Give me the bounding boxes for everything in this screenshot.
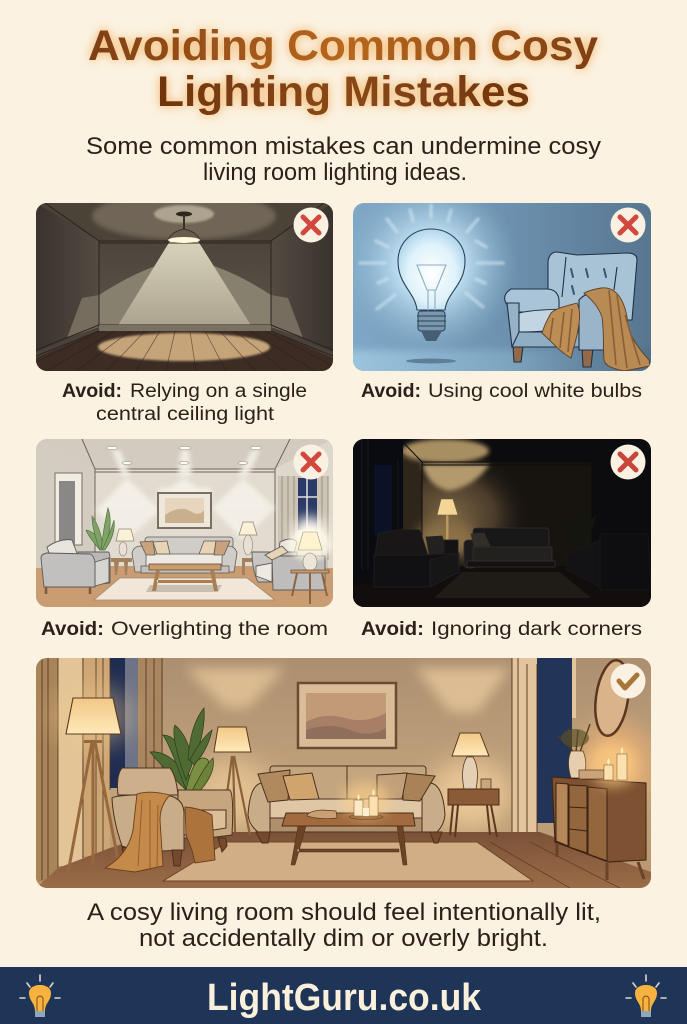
panel: single central ceiling light: [36, 203, 333, 371]
icon: cross badge: [610, 208, 646, 242]
subtitle: living room lighting ideas.: [203, 159, 467, 186]
floor lamp: [437, 499, 458, 542]
centre sofa: [464, 528, 555, 568]
caption: cool white bulbs: [361, 381, 642, 402]
coffee table with candles: [282, 782, 415, 865]
doorway: [512, 658, 576, 836]
right sofa: [567, 534, 651, 590]
caption: single central ceiling light: Relying on a single: [130, 381, 307, 402]
caption: single central ceiling light: Avoid:: [62, 381, 122, 402]
caption: cool white bulbs: Using cool white bulbs: [428, 381, 642, 402]
pendant lamp: [168, 212, 200, 243]
icon: light bulb: [398, 229, 465, 341]
light rays: [360, 205, 503, 309]
orange throw blanket: [105, 792, 215, 872]
bulb shadow: [406, 358, 456, 364]
door: [55, 473, 82, 545]
left armchair: [41, 540, 110, 594]
sideboard candles: [579, 743, 637, 787]
caption: single central ceiling light: [62, 381, 307, 425]
closing statement: [87, 899, 601, 952]
subtitle: Some common mistakes can undermine cosy: [86, 133, 601, 160]
sideboard: [552, 777, 646, 880]
icon: cross badge: [294, 444, 328, 480]
sofa: [132, 537, 237, 573]
subtitle: [86, 133, 601, 186]
panel: dark corners: [353, 439, 651, 607]
closing statement: not accidentally dim or overly bright.: [139, 925, 548, 952]
caption: overlighting: [41, 619, 328, 640]
caption: overlighting: Overlighting the room: [111, 619, 328, 640]
tufting: [571, 269, 606, 294]
armchair: [505, 252, 637, 367]
right armchair: [252, 539, 325, 590]
armchair: [112, 768, 233, 866]
icon: cross badge: [294, 208, 328, 242]
caption: single central ceiling light: central ceiling light: [96, 404, 275, 425]
plant: [150, 708, 213, 795]
footer wordmark: LightGuru.co.uk: [207, 977, 482, 1019]
title: [88, 22, 598, 116]
sofa: [248, 766, 445, 843]
panel: overlit room: [36, 439, 333, 607]
coffee table: [149, 564, 221, 591]
floor and rug: [36, 566, 333, 607]
plant silhouette: [592, 516, 596, 528]
left sofa: [374, 530, 459, 587]
caption: dark corners: Avoid:: [361, 619, 424, 640]
panel: cool white bulb: [353, 203, 651, 371]
wall glows: [185, 668, 651, 830]
icon: footer bulb left: [20, 975, 60, 1017]
throw blanket: [542, 288, 650, 371]
framed picture: [158, 493, 211, 528]
icon: footer bulb right: [626, 975, 666, 1017]
icon: check badge: [610, 664, 646, 698]
caption: dark corners: Ignoring dark corners: [431, 619, 642, 640]
window with curtains: [278, 476, 328, 568]
caption: overlighting: Avoid:: [41, 619, 104, 640]
ceiling with glow: [40, 203, 329, 240]
rug and floor: [353, 566, 651, 607]
caption: cool white bulbs: Avoid:: [361, 381, 421, 402]
tripod floor lamp small: [214, 727, 251, 835]
ceiling and side walls: [36, 439, 332, 568]
caption: dark corners: [361, 619, 642, 640]
panel: cosy room: [36, 658, 651, 888]
ceiling spotlights: [106, 446, 262, 464]
window and curtains: [353, 439, 403, 574]
closing statement: A cosy living room should feel intentionally lit,: [87, 899, 601, 926]
glowing table lamp: [288, 529, 332, 604]
framed painting: [298, 683, 396, 748]
light cones: [96, 450, 275, 540]
back lamps and side tables: [111, 522, 258, 576]
title: Avoiding Common Cosy: [88, 22, 598, 70]
walls: [36, 203, 333, 356]
icon: cross badge: [610, 444, 646, 480]
floor and rug: [36, 832, 651, 888]
footer band: [0, 967, 687, 1024]
mirror: [591, 658, 633, 738]
vase with branches: [558, 724, 590, 778]
tripod floor lamp large: [51, 684, 135, 873]
curtains and window: [36, 658, 163, 882]
floor with light pool: [18, 331, 344, 371]
side table with lamp: [448, 733, 499, 837]
title: Lighting Mistakes: [157, 68, 530, 116]
plant: [86, 508, 114, 550]
back wall and ceiling glow: [403, 439, 592, 566]
